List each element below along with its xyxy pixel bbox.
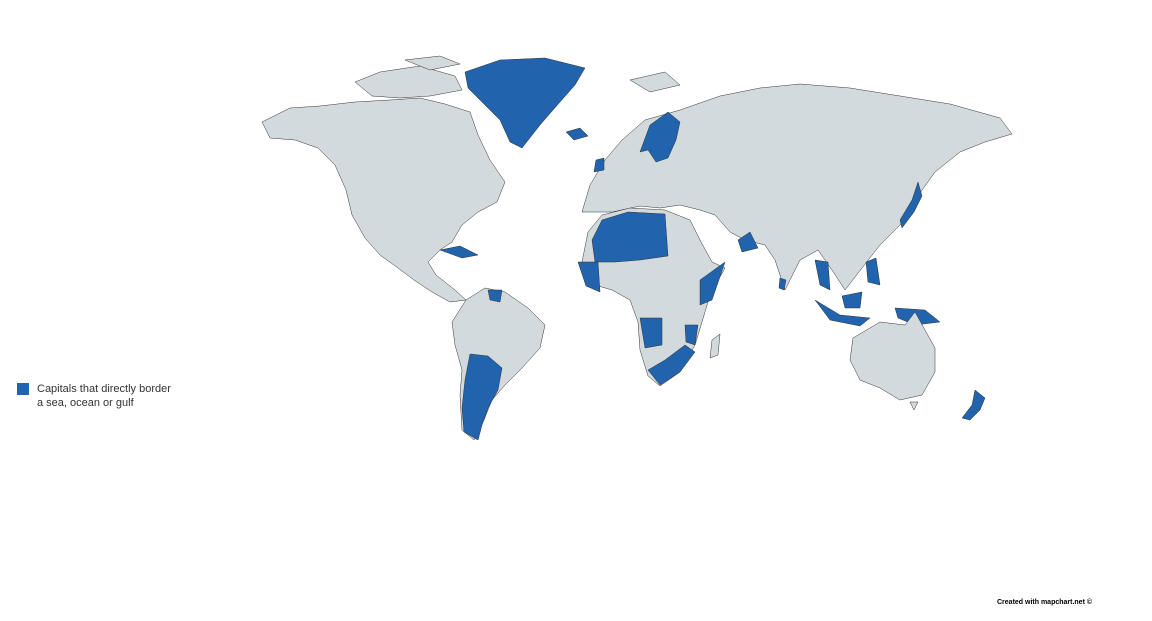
map: indonesia <box>815 300 870 326</box>
map: oman <box>738 232 758 252</box>
map: argentina <box>462 354 502 440</box>
map: west africa <box>578 262 600 292</box>
map: southern africa <box>648 345 695 385</box>
legend text: Capitals that directly border <box>37 383 171 395</box>
map: south america <box>452 288 545 440</box>
map: papua <box>895 308 940 325</box>
map: madagascar <box>710 334 720 358</box>
legend text <box>37 383 171 409</box>
map: southeast asia <box>815 260 830 290</box>
map: iceland <box>566 128 588 140</box>
map: angola <box>640 318 662 348</box>
map: north africa <box>592 212 668 262</box>
map: east africa <box>700 262 725 305</box>
map: sri lanka <box>779 278 786 290</box>
legend swatch <box>17 383 29 395</box>
legend <box>17 383 171 409</box>
map: caribbean <box>440 246 478 258</box>
map: japan <box>900 182 922 228</box>
map: ireland <box>594 158 604 172</box>
map: australia <box>850 312 935 400</box>
map: new zealand <box>962 390 985 420</box>
map: north america <box>262 56 505 302</box>
map: scandinavia <box>640 112 680 162</box>
map: eurasia <box>582 84 1012 290</box>
map: greenland <box>465 58 585 148</box>
legend text: a sea, ocean or gulf <box>37 397 134 409</box>
credit: Created with mapchart.net © <box>997 599 1092 606</box>
map: africa <box>582 208 725 386</box>
